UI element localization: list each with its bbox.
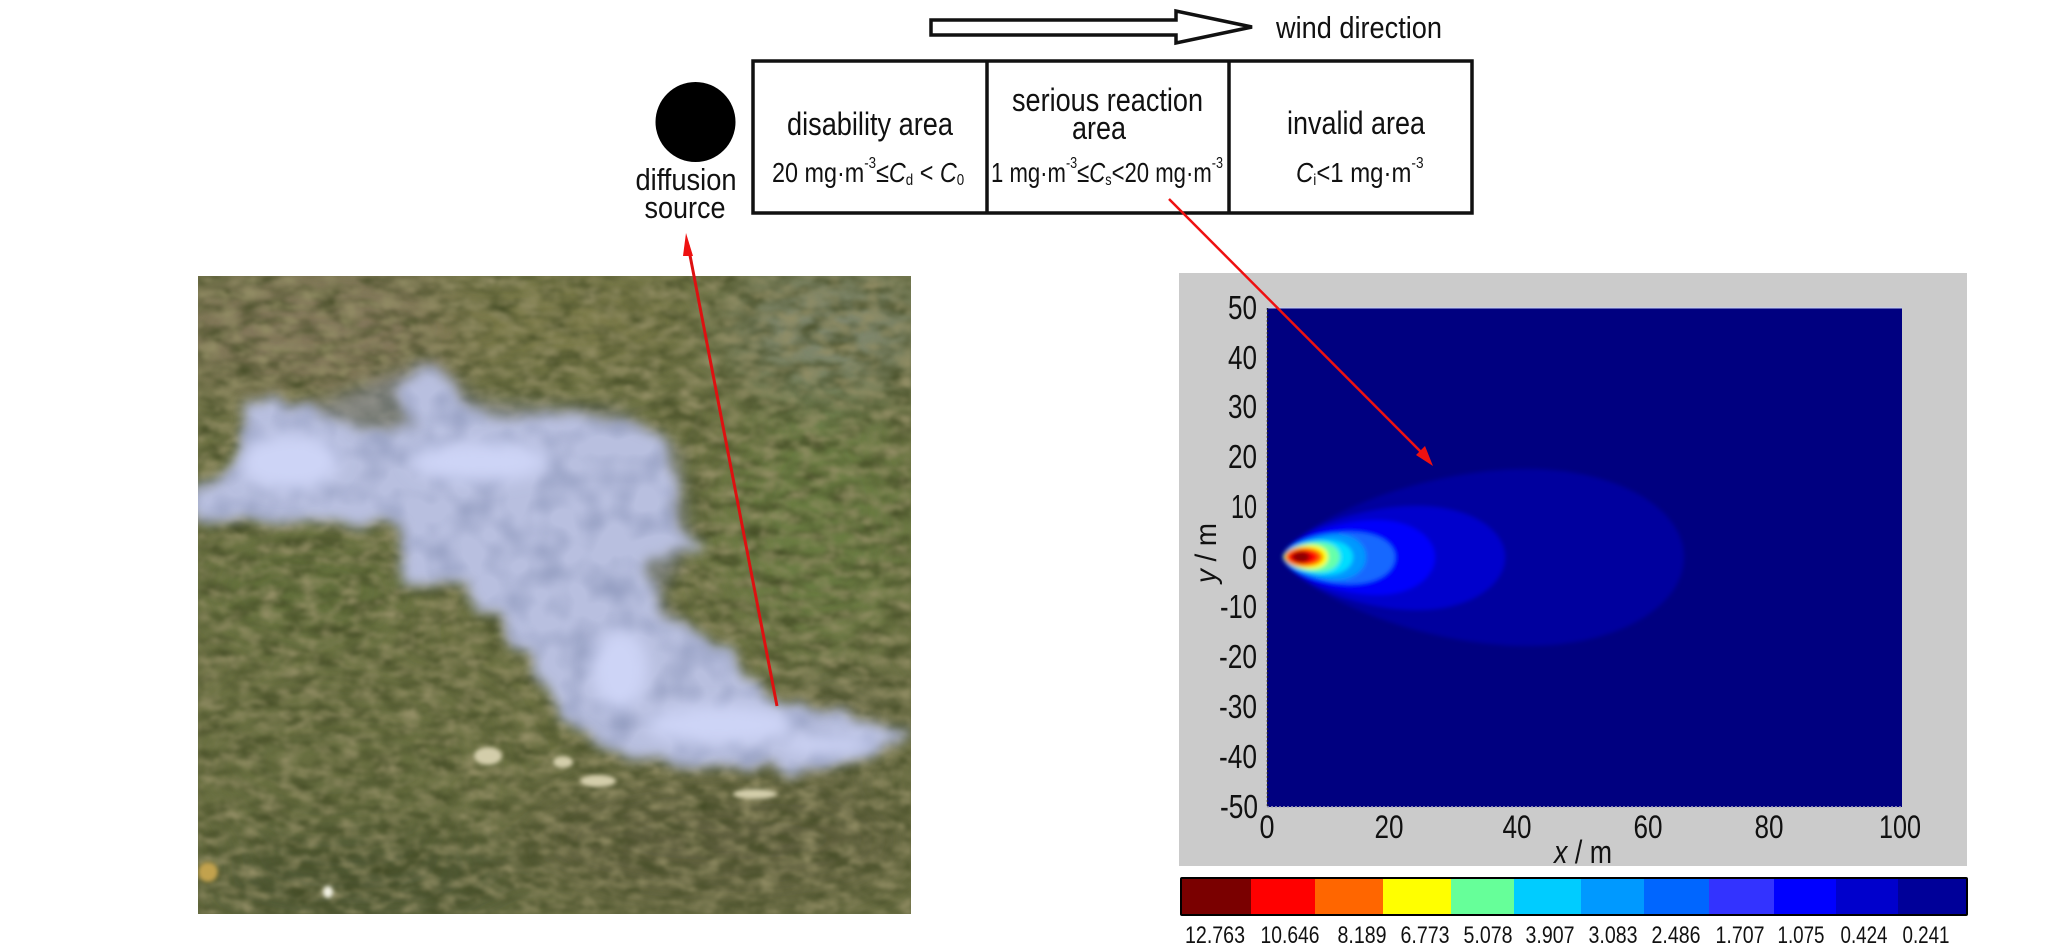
y axis tick labels: -20 <box>1219 638 1257 675</box>
y axis tick labels: -10 <box>1220 588 1257 625</box>
plot background <box>1179 273 1967 866</box>
wind direction arrow <box>931 11 1252 43</box>
invalid area cell <box>1287 105 1425 189</box>
y axis tick labels: 0 <box>1242 539 1257 576</box>
serious reaction area cell: <20 mg·m <box>1112 158 1212 189</box>
stones on grass <box>198 747 777 898</box>
invalid area cell: <1 mg·m <box>1316 156 1411 188</box>
colour legend values: 3.907 <box>1526 922 1574 949</box>
colour legend values: 6.773 <box>1400 922 1450 949</box>
y axis tick labels <box>1219 289 1258 825</box>
colour legend values <box>1185 922 1950 949</box>
y axis tick labels: 50 <box>1228 289 1257 326</box>
colour legend values: 5.078 <box>1464 922 1512 949</box>
disability area cell: C <box>889 158 906 189</box>
disability area cell: C <box>940 158 957 189</box>
y axis tick labels: 20 <box>1228 438 1257 475</box>
y axis tick labels: -40 <box>1219 738 1257 775</box>
smoke highlights <box>240 434 880 754</box>
invalid area cell: invalid area <box>1287 105 1425 141</box>
diffusion source label <box>636 162 736 225</box>
disability area cell: -3 <box>864 155 876 172</box>
colour legend values: 3.083 <box>1588 922 1638 949</box>
y axis tick labels: 40 <box>1228 339 1257 376</box>
diffusion source label: source <box>644 190 726 225</box>
disability area cell <box>772 106 964 189</box>
colour legend values: 2.486 <box>1652 922 1700 949</box>
diffusion source label: diffusion <box>636 162 736 197</box>
wind direction label: wind direction <box>1275 10 1442 45</box>
x axis tick labels: 60 <box>1634 809 1662 845</box>
contour map field <box>1267 307 1902 807</box>
x axis tick labels: 20 <box>1374 809 1404 845</box>
disability area cell: 0 <box>957 172 964 189</box>
serious reaction area cell: s <box>1105 172 1112 189</box>
photo grass texture <box>198 276 911 914</box>
y axis title: y / m <box>1190 523 1223 585</box>
colour legend values: 8.189 <box>1338 922 1386 949</box>
panel: concentration contour plot <box>1179 273 1967 870</box>
serious reaction area cell: -3 <box>1212 155 1223 172</box>
colour legend values: 12.763 <box>1185 922 1245 949</box>
colour legend bar <box>1180 877 1968 916</box>
serious reaction area cell: 1 mg·m <box>991 158 1066 189</box>
smoke body <box>190 367 902 772</box>
disability area cell: disability area <box>787 106 953 142</box>
disability area cell: < <box>913 158 940 189</box>
serious reaction area cell: -3 <box>1066 155 1077 172</box>
disability area cell: 20 mg·m <box>772 158 864 189</box>
serious reaction area cell: C <box>1089 158 1106 189</box>
arrow: photo smoke to diffusion source <box>683 233 777 706</box>
serious reaction area cell: ≤ <box>1077 158 1089 189</box>
disability area cell: d <box>906 172 913 189</box>
y axis tick labels: 30 <box>1228 388 1257 425</box>
colour legend values: 1.707 <box>1716 922 1764 949</box>
zone table <box>753 61 1472 213</box>
smoke haze <box>308 355 704 638</box>
colour legend values: 0.241 <box>1902 922 1950 949</box>
invalid area cell: C <box>1296 156 1313 188</box>
x axis title: x / m <box>1552 834 1612 870</box>
disability area cell: ≤ <box>876 158 889 189</box>
serious reaction area cell: area <box>1072 110 1126 146</box>
invalid area cell: -3 <box>1411 155 1424 172</box>
x axis tick labels <box>1260 809 1921 845</box>
invalid area cell: i <box>1313 172 1316 189</box>
y axis tick labels: -30 <box>1219 688 1257 725</box>
serious reaction area cell <box>991 82 1223 189</box>
colour legend values: 0.424 <box>1840 922 1888 949</box>
arrow: serious reaction area to contour <box>1169 199 1433 466</box>
colour legend values: 1.075 <box>1778 922 1824 949</box>
x axis tick labels: 80 <box>1754 809 1784 845</box>
y axis tick labels: 10 <box>1231 488 1257 525</box>
serious reaction area cell: serious reaction <box>1012 82 1203 118</box>
x axis tick labels: 0 <box>1260 809 1274 845</box>
photo background colour patches <box>198 276 911 914</box>
x axis tick labels: 40 <box>1502 809 1532 845</box>
y axis tick labels: -50 <box>1220 788 1258 825</box>
photo: smoke diffusing over grass <box>198 276 911 914</box>
x axis tick labels: 100 <box>1879 809 1921 845</box>
table frame <box>753 61 1472 213</box>
colour legend values: 10.646 <box>1260 922 1320 949</box>
icon: diffusion source circle <box>656 82 736 162</box>
